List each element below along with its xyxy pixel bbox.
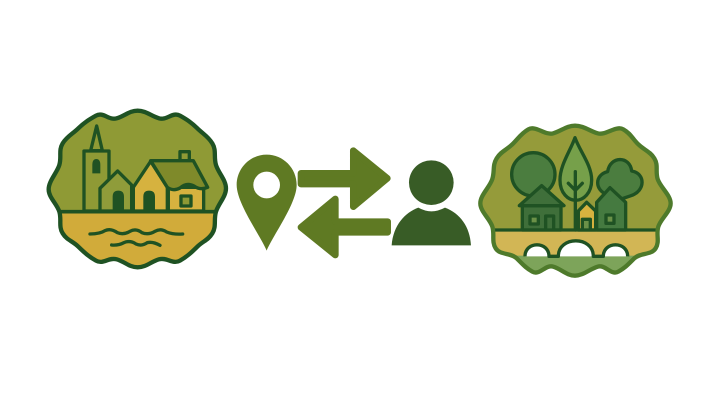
bridge arches xyxy=(525,241,628,256)
cloud tree xyxy=(598,160,642,200)
arrow: pointing right xyxy=(301,151,387,207)
small yellow house xyxy=(578,202,596,230)
church tower xyxy=(84,126,109,211)
icon: village badge with trees, houses and bridge xyxy=(478,124,673,278)
tall tree xyxy=(560,138,592,230)
icon: map location pin xyxy=(237,155,297,251)
ground line and outline xyxy=(60,206,215,217)
icon: village badge with church, houses and river xyxy=(46,108,228,270)
round tree xyxy=(512,153,555,196)
icon: person xyxy=(392,160,471,245)
thatched cottage xyxy=(133,152,208,211)
left house xyxy=(519,186,564,230)
right house xyxy=(597,188,626,230)
ground line and outline xyxy=(495,225,657,235)
river waves xyxy=(90,230,183,245)
arrow: pointing left xyxy=(301,199,388,255)
small house xyxy=(100,171,132,211)
